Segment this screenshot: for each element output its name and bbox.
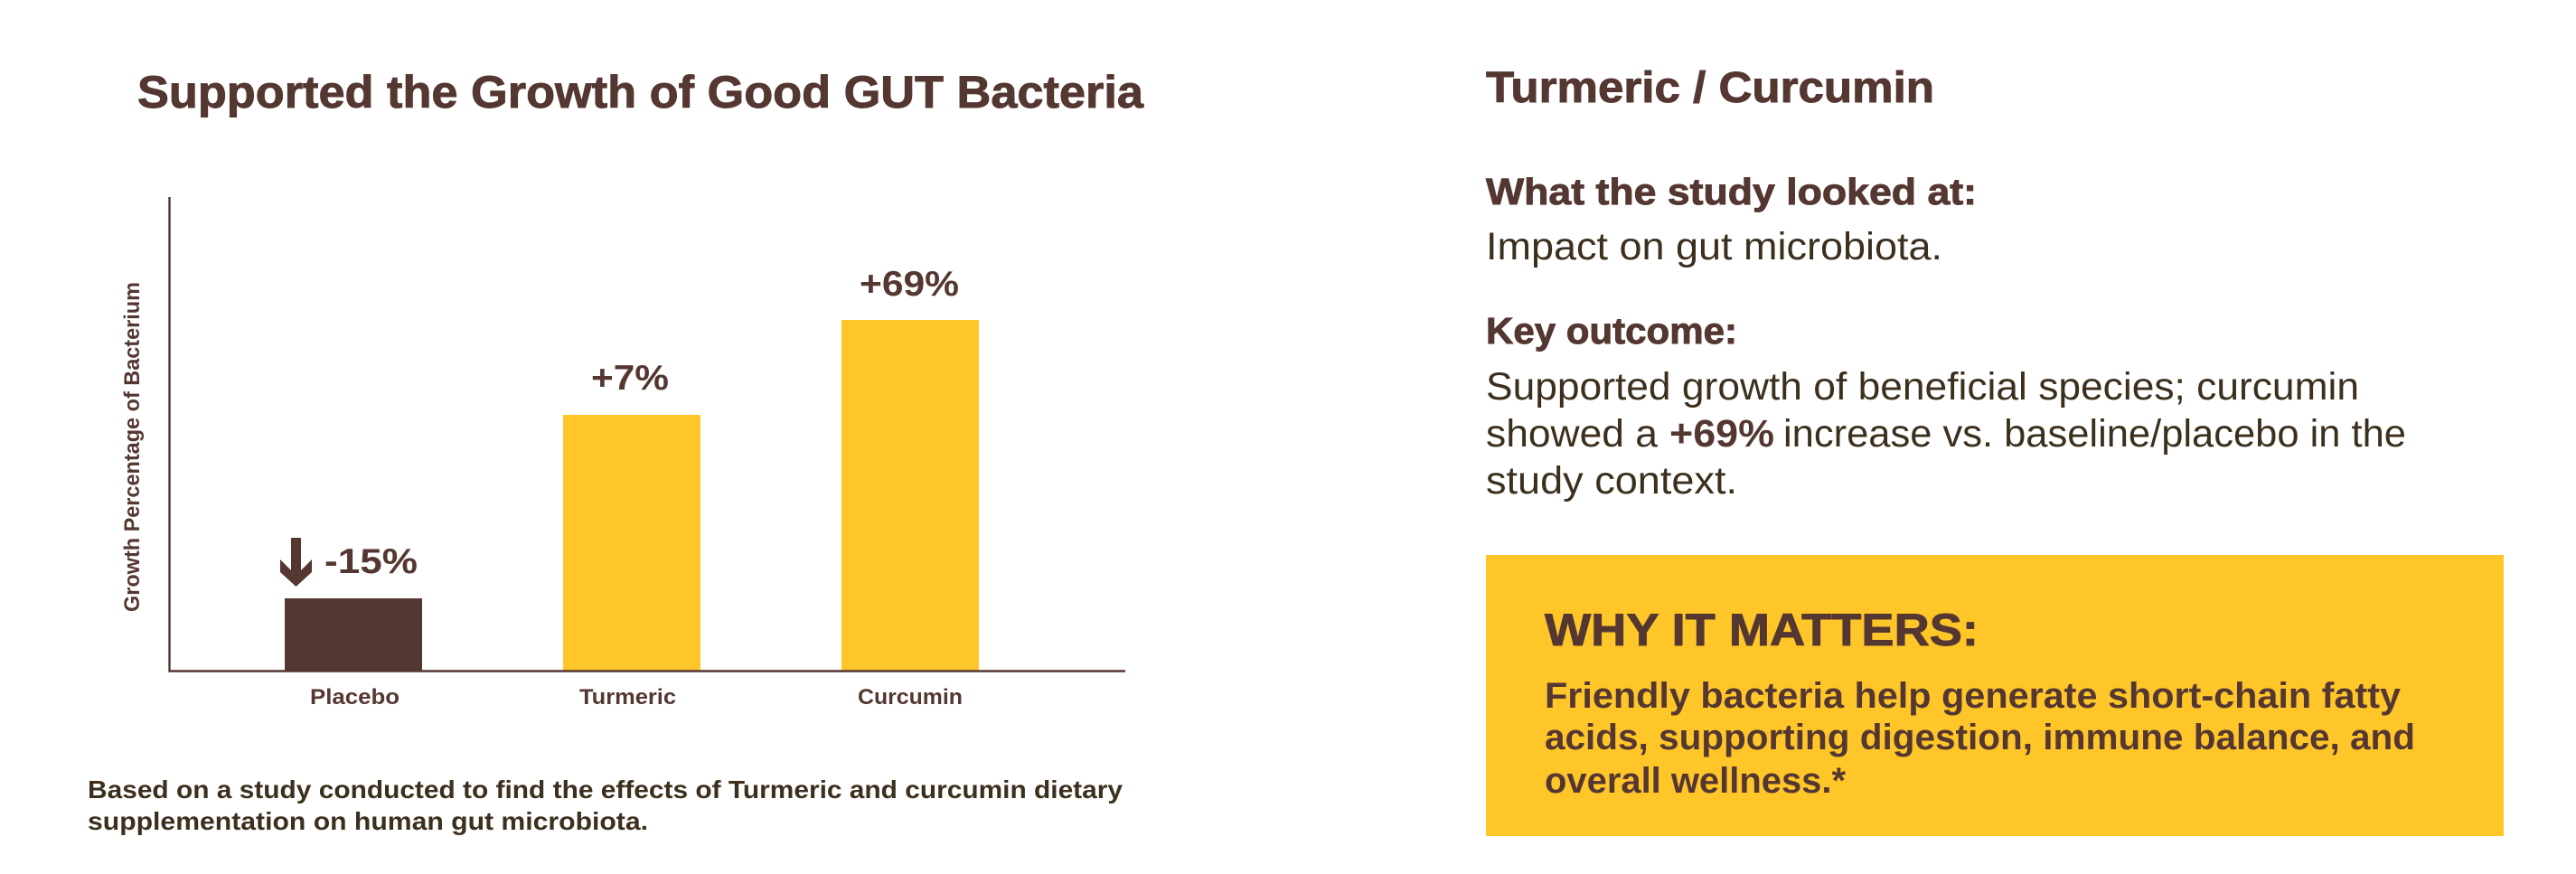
y-axis label: Growth Percentage of Bacterium [120, 282, 145, 612]
callout body: acids, supporting digestion, immune balance, and [1545, 718, 2415, 757]
callout body: Friendly bacteria help generate short-chain fatty [1545, 676, 2402, 716]
text: key outcome: Supported growth of beneficial species; curcumin [1486, 365, 2359, 409]
text: key outcome [1486, 365, 2406, 503]
heading: turmeric / curcumin: Turmeric / Curcumin [1486, 64, 1934, 112]
x label: curcumin: Curcumin [858, 685, 963, 710]
bar: turmeric [563, 415, 700, 671]
text: key outcome: showed a [1486, 412, 1658, 456]
value: turmeric: +7% [591, 359, 669, 398]
panel: bar chart section [88, 67, 1144, 835]
value: placebo: -15% [324, 542, 418, 581]
callout body [1545, 676, 2415, 801]
bar: curcumin [841, 320, 979, 671]
text: study focus: Impact on gut microbiota. [1486, 225, 1942, 268]
callout body: overall wellness.* [1545, 761, 1846, 801]
chart axes [170, 197, 1125, 671]
footnote: supplementation on human gut microbiota. [88, 807, 648, 835]
bar: placebo [285, 598, 422, 671]
callout heading: WHY IT MATTERS: [1545, 605, 1979, 655]
panel: study summary [1486, 64, 2406, 503]
subheading: key outcome: Key outcome: [1486, 310, 1737, 352]
icon: down arrow [280, 538, 312, 587]
footnote: Based on a study conducted to find the effects of Turmeric and curcumin dietary [88, 775, 1123, 804]
footnote [88, 775, 1123, 835]
bar chart [120, 197, 1125, 710]
text: key outcome: increase vs. baseline/placebo in the [1783, 412, 2406, 456]
x label: placebo: Placebo [310, 685, 400, 710]
chart title: Supported the Growth of Good GUT Bacteria [137, 67, 1144, 117]
value: curcumin: +69% [860, 265, 959, 304]
text: key outcome: study context. [1486, 459, 1737, 503]
subheading: what the study looked at: What the study looked at: [1486, 171, 1977, 212]
x label: turmeric: Turmeric [579, 685, 676, 710]
text: key outcome: +69% [1669, 412, 1774, 456]
callout: why it matters [1486, 555, 2504, 836]
callout background [1486, 555, 2504, 836]
